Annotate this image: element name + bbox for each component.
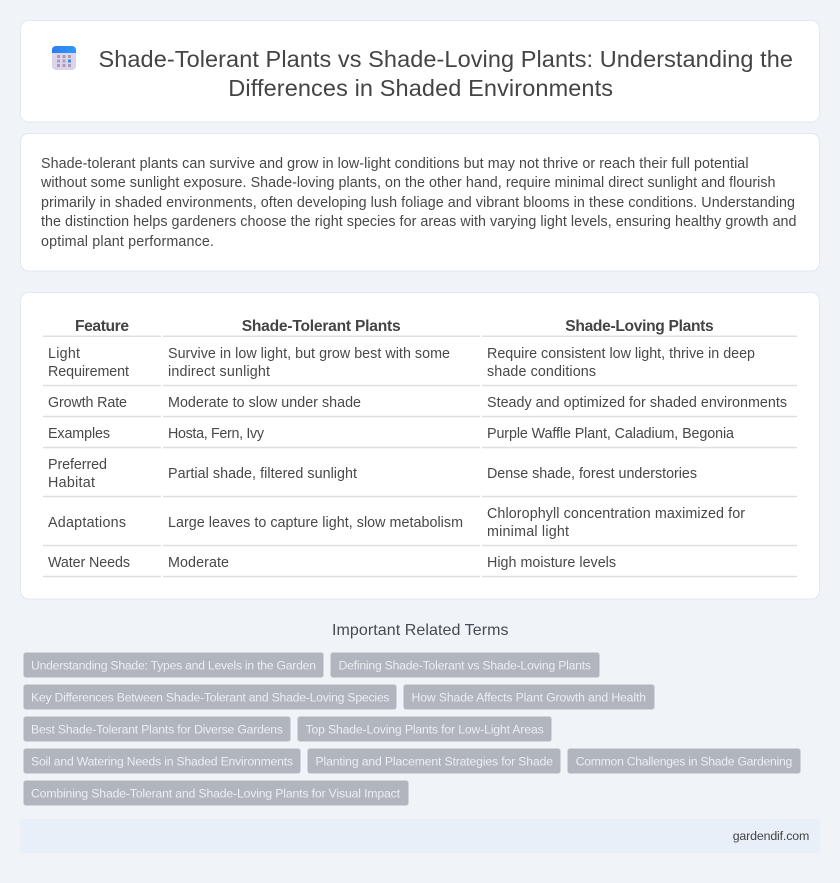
chip: Combining Shade-Tolerant and Shade-Loving Plants for Visual Impact xyxy=(31,786,401,800)
chip xyxy=(330,652,600,678)
row: examples xyxy=(48,426,734,442)
row: preferred habitat: Preferred xyxy=(48,457,107,473)
row: adaptations: Chlorophyll concentration maximized for xyxy=(487,506,745,522)
chip xyxy=(308,748,560,774)
row: light requirement: Requirement xyxy=(48,364,129,380)
chip xyxy=(24,748,300,774)
chip: Common Challenges in Shade Gardening xyxy=(576,754,792,768)
chip xyxy=(24,684,396,710)
panel: related term chips xyxy=(24,652,800,806)
row: water needs: Moderate xyxy=(168,555,229,571)
text block: introduction xyxy=(40,156,797,250)
row: water needs: High moisture levels xyxy=(487,555,616,571)
panel: introduction xyxy=(20,134,820,271)
table header xyxy=(75,318,714,335)
text block: introduction: primarily in shaded environments, often developing lush foliage and vibrant blooms in these conditions. Understanding xyxy=(41,195,795,211)
row: light requirement xyxy=(48,346,755,380)
chip xyxy=(24,652,324,678)
row: preferred habitat: Habitat xyxy=(48,475,95,491)
row: water needs xyxy=(48,555,616,571)
chip xyxy=(298,716,552,742)
text block: introduction: optimal plant performance. xyxy=(41,234,214,250)
row: adaptations: Adaptations xyxy=(48,515,126,531)
row: light requirement: shade conditions xyxy=(487,364,596,380)
chip: Best Shade-Tolerant Plants for Diverse Gardens xyxy=(31,722,283,736)
title: Differences in Shaded Environments xyxy=(228,75,613,101)
row: adaptations: Large leaves to capture light, slow metabolism xyxy=(168,515,463,531)
text block: introduction: the distinction helps gardeners choose the right species for areas with varying light levels, ensuring healthy growth and xyxy=(41,214,797,230)
icon: calendar xyxy=(52,46,76,70)
row: adaptations: minimal light xyxy=(487,524,569,540)
chip xyxy=(404,684,654,710)
row: light requirement: Light xyxy=(48,346,80,362)
row: growth rate xyxy=(48,395,787,411)
table header: Shade-Loving Plants xyxy=(565,318,714,335)
chip: How Shade Affects Plant Growth and Health xyxy=(412,690,646,704)
row: examples: Examples xyxy=(48,426,110,442)
heading: important related terms: Important Related Terms xyxy=(332,622,508,639)
row: preferred habitat: Dense shade, forest understories xyxy=(487,466,697,482)
table header: Feature xyxy=(75,318,129,335)
chip: Top Shade-Loving Plants for Low-Light Areas xyxy=(306,722,544,736)
row: growth rate: Growth Rate xyxy=(48,395,127,411)
chip xyxy=(568,748,800,774)
chip: Key Differences Between Shade-Tolerant and Shade-Loving Species xyxy=(31,690,390,704)
row: growth rate: Steady and optimized for shaded environments xyxy=(487,395,787,411)
row: examples: Hosta, Fern, Ivy xyxy=(168,426,265,442)
title: Shade-Tolerant Plants vs Shade-Loving Plants: Understanding the xyxy=(98,46,793,72)
chip: Soil and Watering Needs in Shaded Environments xyxy=(31,754,293,768)
row: preferred habitat: Partial shade, filtered sunlight xyxy=(168,466,357,482)
chip: Understanding Shade: Types and Levels in the Garden xyxy=(31,658,316,672)
row: light requirement: Survive in low light, but grow best with some xyxy=(168,346,450,362)
chip: Planting and Placement Strategies for Shade xyxy=(316,754,553,768)
row: water needs: Water Needs xyxy=(48,555,130,571)
chip xyxy=(24,716,290,742)
row: adaptations xyxy=(48,506,745,540)
row: light requirement: Require consistent low light, thrive in deep xyxy=(487,346,755,362)
chip xyxy=(24,780,408,806)
panel: comparison table xyxy=(20,292,820,599)
footer: gardendif.com xyxy=(733,829,809,843)
chip: Defining Shade-Tolerant vs Shade-Loving Plants xyxy=(338,658,591,672)
panel: header xyxy=(20,20,820,122)
row: light requirement: indirect sunlight xyxy=(168,364,270,380)
table header: Shade-Tolerant Plants xyxy=(242,318,401,335)
footer xyxy=(20,819,820,853)
text block: introduction: without some sunlight exposure. Shade-loving plants, on the other hand, require minimal direct sunlight and flourish xyxy=(40,175,776,191)
row: preferred habitat xyxy=(48,457,697,491)
title xyxy=(98,46,793,101)
row: examples: Purple Waffle Plant, Caladium, Begonia xyxy=(487,426,734,442)
text block: introduction: Shade-tolerant plants can survive and grow in low-light conditions but may not thrive or reach their full potential xyxy=(41,156,748,172)
row: growth rate: Moderate to slow under shade xyxy=(168,395,361,411)
